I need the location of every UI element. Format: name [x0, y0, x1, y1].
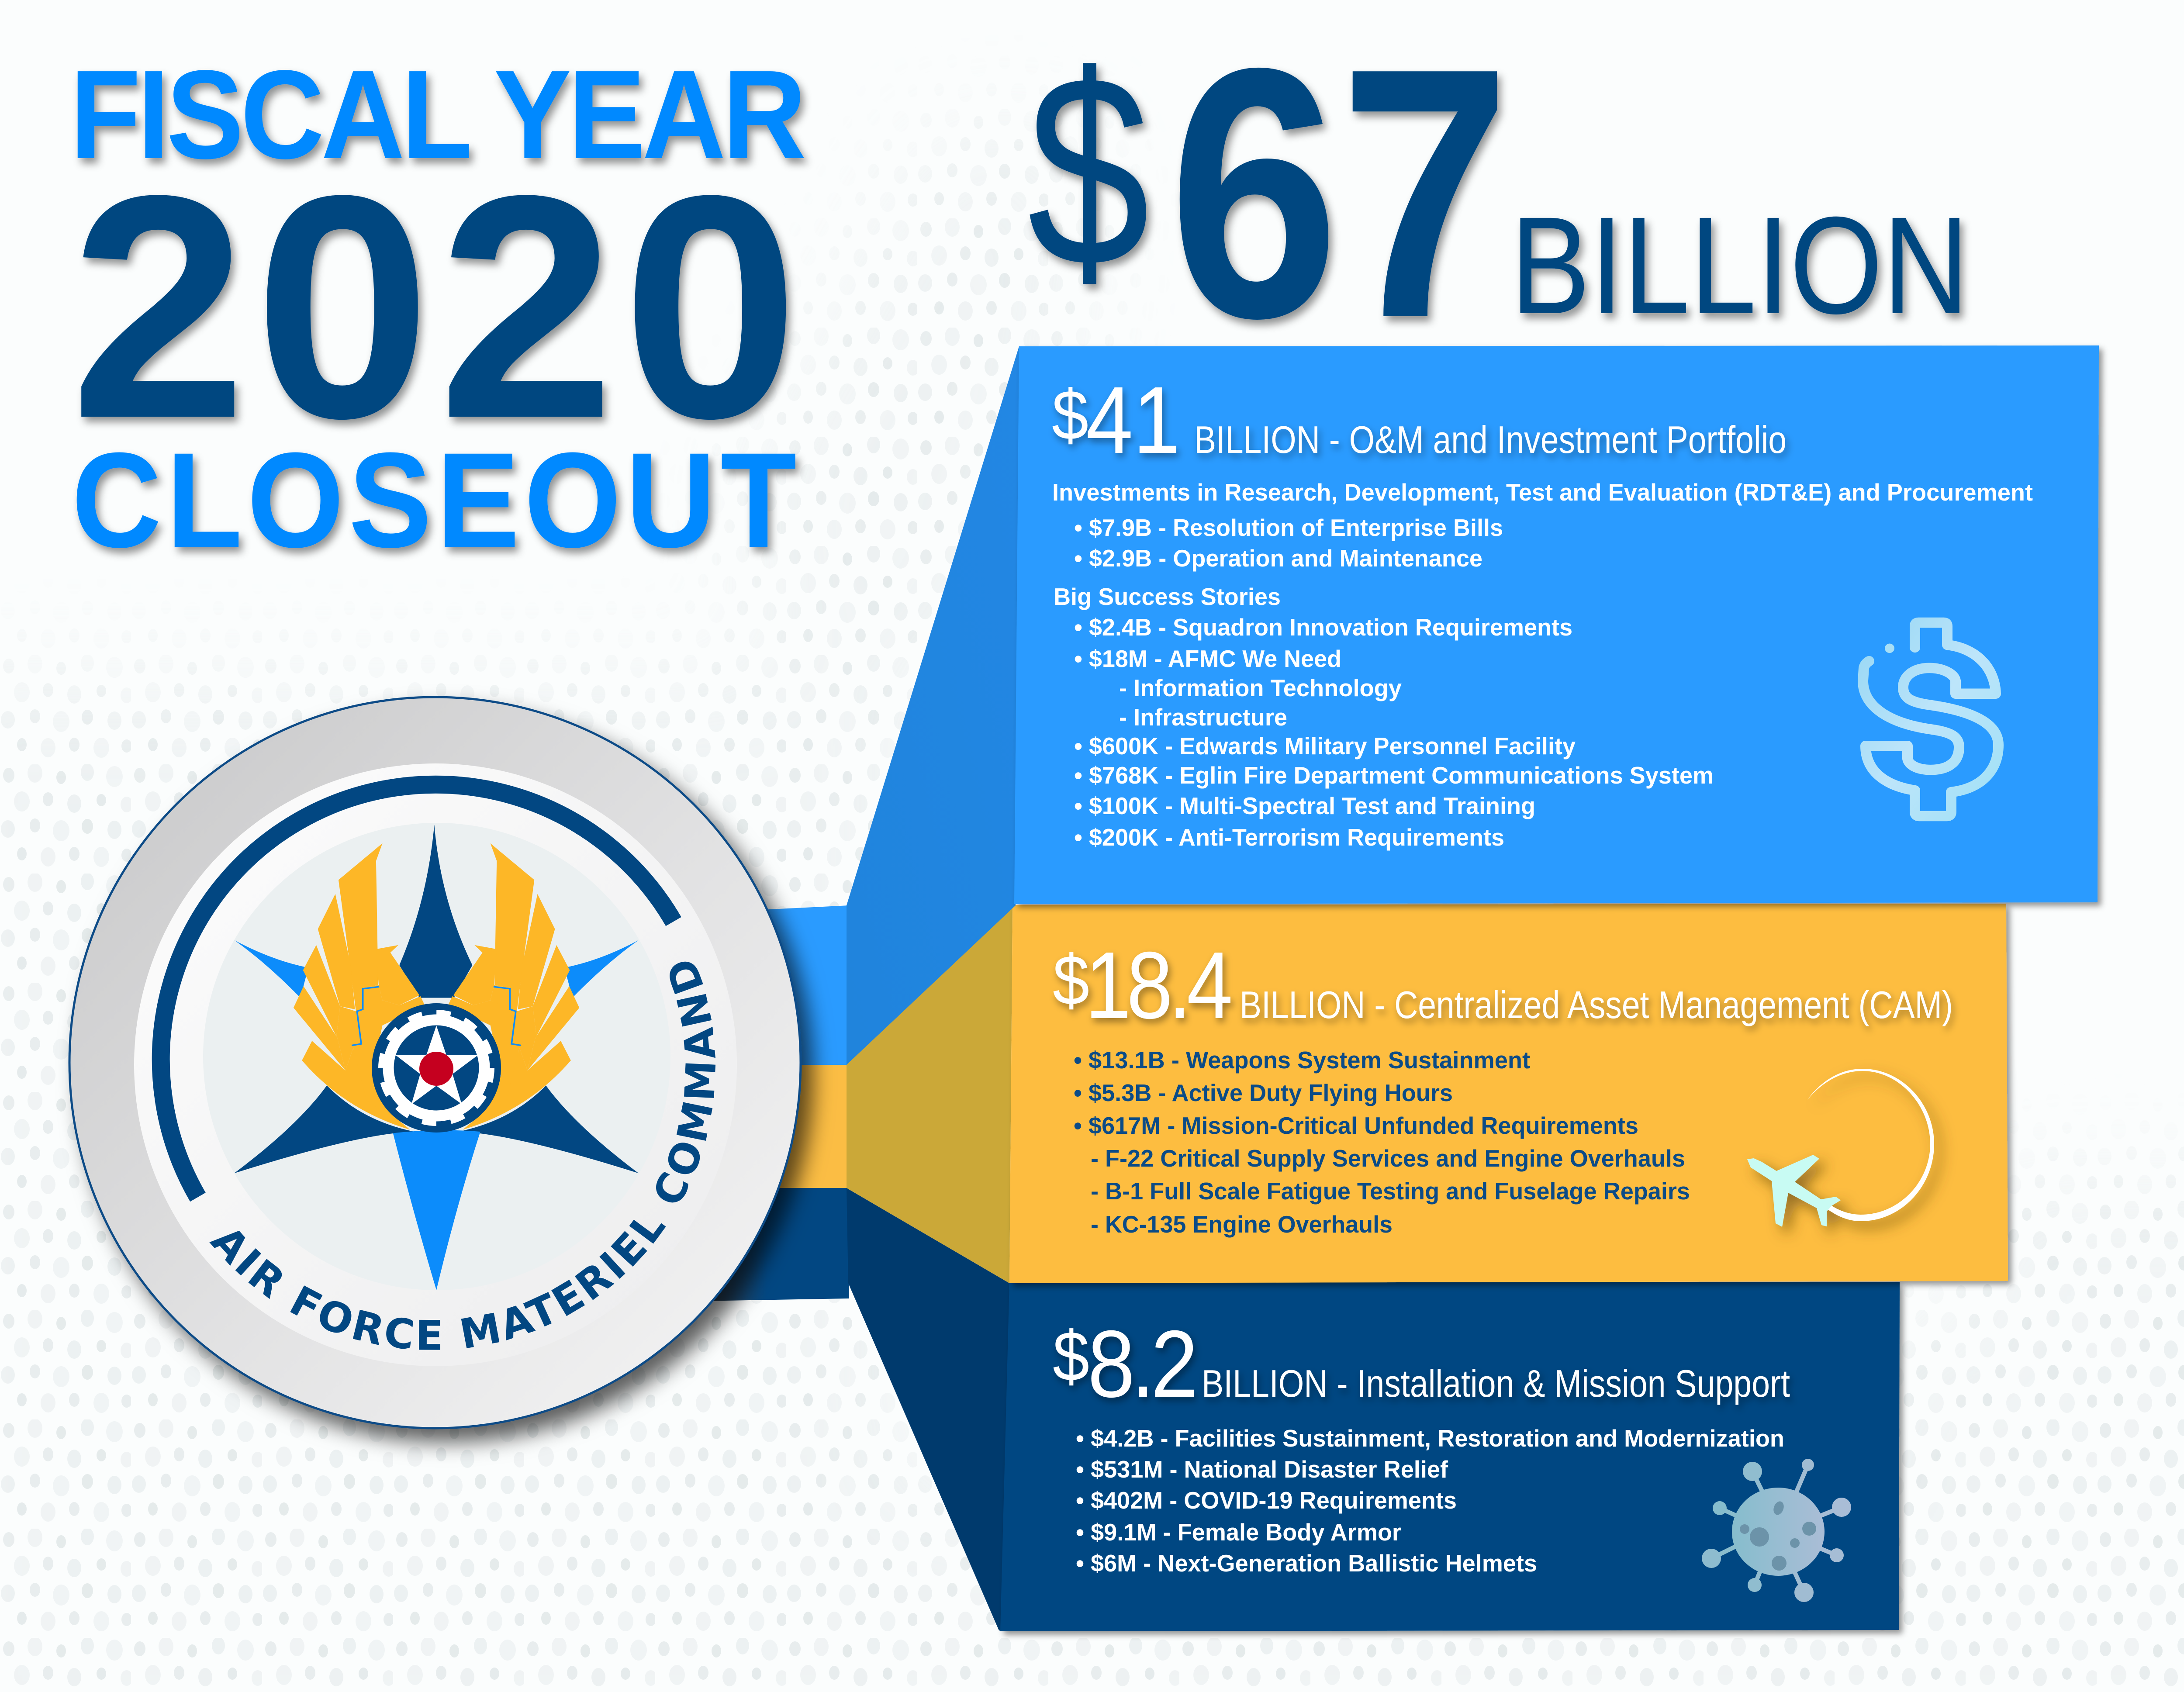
- bullet list: - B-1 Full Scale Fatigue Testing and Fuselage Repairs: [1091, 1177, 1690, 1205]
- list: investments: [1052, 479, 2033, 572]
- bullet list: • $402M - COVID-19 Requirements: [1076, 1487, 1457, 1514]
- amount and label: $: [1052, 376, 1089, 455]
- emblem star and wings: [234, 825, 639, 1290]
- list: big success stories: • $100K - Multi-Spectral Test and Training: [1074, 792, 1535, 819]
- star spikes: light blue sides: [234, 940, 639, 998]
- seal inner white ring: [134, 763, 737, 1366]
- total: $67 billion: [1027, 0, 1969, 392]
- emblem center: gear and star: [372, 1003, 501, 1133]
- curved label: AIR FORCE MATERIEL COMMAND: [202, 950, 726, 1360]
- star spike: top navy: [399, 825, 472, 998]
- bullet list: [1074, 1046, 1690, 1238]
- title: fiscal year 2020 closeout: [70, 44, 806, 576]
- star spike: bottom light blue: [393, 1130, 480, 1290]
- star spikes: navy lower: [234, 1085, 639, 1173]
- list: big success stories: Big Success Stories: [1054, 583, 1281, 610]
- panel face: blue: [1014, 345, 2099, 904]
- bullet list: • $9.1M - Female Body Armor: [1076, 1519, 1401, 1546]
- list: big success stories: - Infrastructure: [1119, 704, 1287, 731]
- list: big success stories: [1054, 583, 1714, 851]
- amount and label: 18.4: [1085, 932, 1230, 1039]
- seal center disc: [203, 823, 670, 1290]
- bullet list: • $531M - National Disaster Relief: [1076, 1456, 1448, 1483]
- dollar sign: $: [1027, 18, 1150, 323]
- panel face: gold: [1009, 904, 2008, 1283]
- wing: right: [448, 843, 579, 1129]
- amount and label: [1053, 932, 1953, 1039]
- panel face: navy: [1000, 1282, 1900, 1631]
- connector bands from seal to panels: [699, 905, 849, 1301]
- amount and label: BILLION - O&M and Investment Portfolio: [1194, 418, 1787, 461]
- amount and label: BILLION - Centralized Asset Management (CAM): [1240, 983, 1953, 1026]
- amount and label: 41: [1086, 367, 1180, 473]
- panel fold: blue wing: [847, 346, 1019, 1065]
- wing: left: [294, 843, 425, 1129]
- word billion: BILLION: [1510, 188, 1969, 343]
- list: big success stories: • $600K - Edwards Military Personnel Facility: [1074, 732, 1576, 760]
- amount and label: $: [1053, 941, 1089, 1020]
- heading: closeout: CLOSEOUT: [72, 425, 797, 576]
- panel: installation and mission support, navy: [847, 1188, 1900, 1631]
- bullet list: • $5.3B - Active Duty Flying Hours: [1074, 1079, 1453, 1106]
- panel fold: gold wing: [847, 905, 1013, 1283]
- list: investments: • $2.9B - Operation and Maintenance: [1074, 545, 1482, 572]
- panel: centralized asset management, gold: [847, 904, 2008, 1283]
- amount and label: $: [1053, 1317, 1089, 1396]
- icon: virus: [1702, 1459, 1851, 1602]
- bullet list: [1076, 1425, 1784, 1577]
- bullet list: - F-22 Critical Supply Services and Engine Overhauls: [1091, 1145, 1685, 1172]
- list: big success stories: - Information Technology: [1119, 674, 1402, 701]
- icon: plane with flight path: [1747, 1069, 1934, 1227]
- amount and label: [1052, 367, 1787, 473]
- bullet list: - KC-135 Engine Overhauls: [1091, 1211, 1393, 1238]
- bullet list: • $6M - Next-Generation Ballistic Helmets: [1076, 1550, 1537, 1577]
- seal: air force materiel command: [69, 697, 801, 1428]
- bullet list: • $4.2B - Facilities Sustainment, Restoration and Modernization: [1076, 1425, 1784, 1452]
- bullet list: • $13.1B - Weapons System Sustainment: [1074, 1046, 1530, 1074]
- icon: dollar sign outline: [1863, 623, 1998, 816]
- amount and label: 8.2: [1088, 1311, 1194, 1417]
- heading: 2020: 2020: [70, 130, 799, 484]
- panel: o and m and investment portfolio, blue: [847, 345, 2099, 1065]
- list: big success stories: • $2.4B - Squadron Innovation Requirements: [1074, 614, 1572, 641]
- list: investments: • $7.9B - Resolution of Enterprise Bills: [1074, 514, 1503, 541]
- list: big success stories: • $18M - AFMC We Need: [1074, 645, 1341, 672]
- seal navy arc: [161, 784, 674, 1197]
- panel fold: navy wing: [847, 1188, 1009, 1631]
- list: investments: Investments in Research, Development, Test and Evaluation (RDT&E) and Procurement: [1052, 479, 2033, 506]
- list: big success stories: • $768K - Eglin Fire Department Communications System: [1074, 762, 1714, 789]
- number 67: 67: [1168, 0, 1510, 392]
- list: big success stories: • $200K - Anti-Terrorism Requirements: [1074, 824, 1504, 851]
- amount and label: BILLION - Installation & Mission Support: [1202, 1362, 1790, 1405]
- seal outer ring: [69, 697, 801, 1428]
- heading: fiscal year: FISCAL YEAR: [70, 44, 806, 185]
- amount and label: [1053, 1311, 1790, 1417]
- bullet list: • $617M - Mission-Critical Unfunded Requirements: [1074, 1112, 1638, 1139]
